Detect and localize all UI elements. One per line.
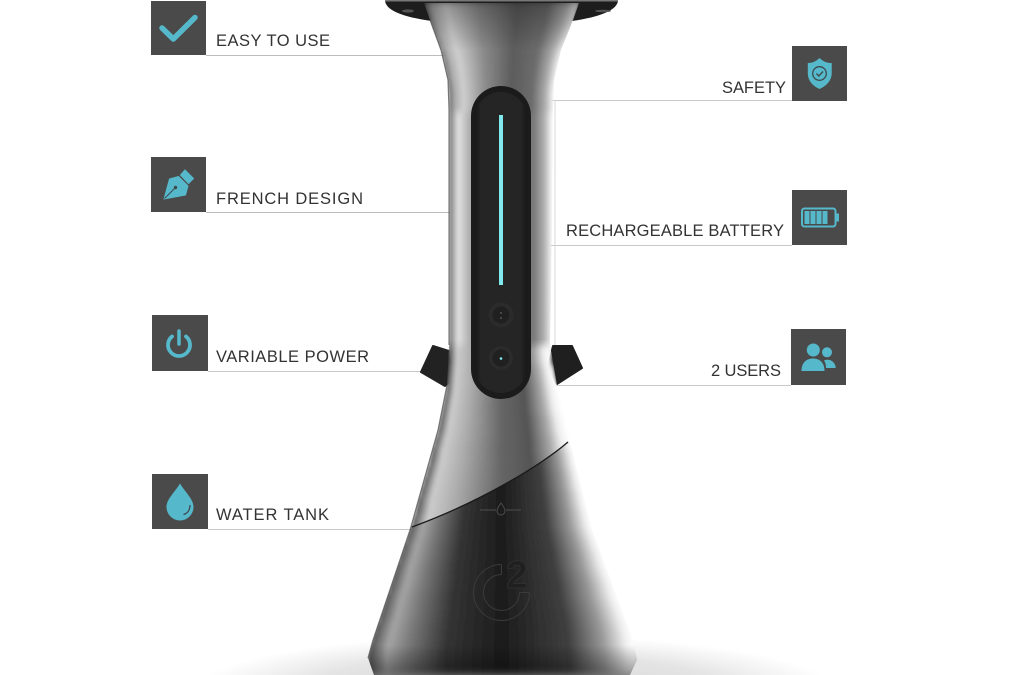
- device left knob: [421, 346, 453, 386]
- top button: [488, 302, 514, 328]
- icon: check mark: [151, 1, 206, 55]
- label: variable power: VARIABLE POWER: [216, 348, 369, 366]
- device right knob: [548, 346, 582, 384]
- device: product illustration: [360, 0, 650, 675]
- leader line: rechargeable battery: [545, 245, 792, 246]
- leader line: easy to use: [206, 55, 446, 56]
- feature: safety: [722, 46, 847, 101]
- device body: [360, 0, 650, 675]
- embossed logo: 2: [506, 554, 528, 597]
- label: 2 users: 2 USERS: [711, 362, 781, 380]
- icon: two users: [791, 329, 846, 385]
- feature: rechargeable battery: [566, 190, 847, 245]
- control panel: [471, 86, 531, 399]
- leader line: vertical right connector: [554, 100, 556, 385]
- feature: 2 users: [711, 329, 846, 385]
- device left edge shading: [368, 20, 449, 658]
- bottom button: [489, 346, 513, 370]
- icon: battery: [792, 190, 847, 245]
- icon: fountain pen nib: [151, 157, 206, 212]
- label: rechargeable battery: RECHARGEABLE BATTERY: [566, 222, 784, 240]
- embossed logo: [474, 554, 530, 620]
- leader line: safety: [545, 100, 792, 101]
- icon: shield: [792, 46, 847, 101]
- feature: water tank: [152, 474, 329, 529]
- leader line: water tank: [208, 529, 414, 530]
- device top disc: [385, 0, 618, 21]
- leader line: variable power: [208, 371, 448, 372]
- label: safety: SAFETY: [722, 79, 786, 97]
- indicator light bar: [499, 115, 503, 285]
- label: french design: FRENCH DESIGN: [216, 190, 363, 208]
- feature: easy to use: [151, 1, 330, 55]
- tank seam: [412, 442, 568, 527]
- feature: french design: [151, 157, 363, 212]
- label: easy to use: EASY TO USE: [216, 32, 330, 50]
- tank water level mark: [480, 503, 521, 515]
- leader line: french design: [206, 212, 450, 213]
- leader line: 2 users: [555, 385, 791, 386]
- icon: water drop: [152, 474, 208, 529]
- ground shadow: [190, 630, 840, 675]
- feature: variable power: [152, 315, 369, 371]
- label: water tank: WATER TANK: [216, 506, 329, 524]
- icon: power button: [152, 315, 208, 371]
